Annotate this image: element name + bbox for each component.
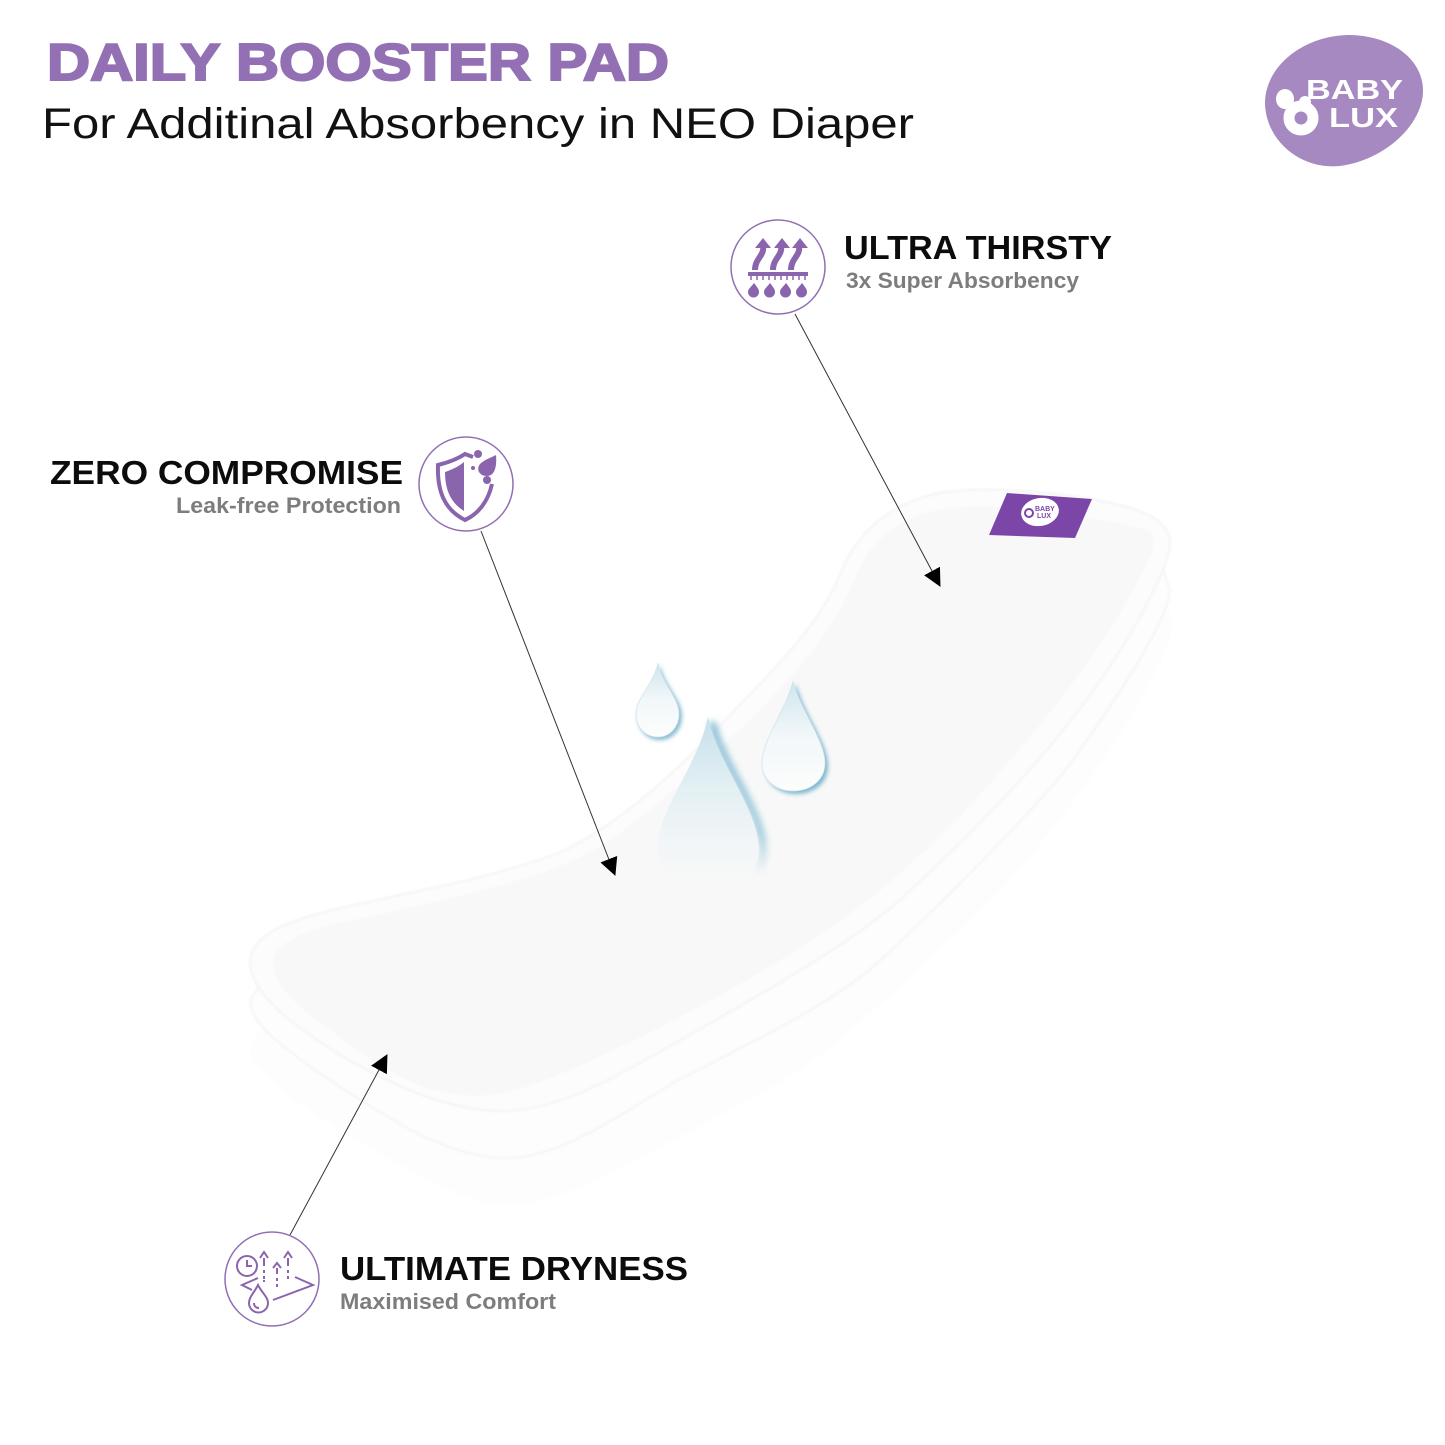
- drop: large: [658, 717, 763, 880]
- arrow: ultra thirsty: [795, 314, 940, 586]
- sewn label: LUX: [1037, 513, 1051, 520]
- subheading: Maximised Comfort: [340, 1289, 557, 1314]
- title: DAILY BOOSTER PAD: [47, 34, 669, 92]
- icon: clock, drop and surface: [225, 1232, 319, 1326]
- heading: ULTRA THIRSTY: [844, 229, 1112, 266]
- icon: shield with drops: [419, 437, 513, 531]
- water drops: [636, 663, 828, 880]
- pad layer 2: [250, 560, 1170, 1158]
- subtitle: For Additinal Absorbency in NEO Diaper: [42, 100, 914, 148]
- pad layer 1 with overlock edge: [250, 490, 1170, 1111]
- arrow: ultimate dryness: [290, 1055, 387, 1235]
- logo: Baby Lux: BABY: [1306, 74, 1403, 105]
- pad layer 3: [250, 590, 1172, 1205]
- subheading: 3x Super Absorbency: [846, 268, 1080, 293]
- sewn label: [989, 493, 1092, 538]
- drop: right: [762, 681, 828, 794]
- heading: ZERO COMPROMISE: [50, 454, 403, 491]
- drop: small: [636, 663, 682, 740]
- feature: zero compromise: [50, 437, 513, 531]
- pad inner terry surface: [273, 507, 1153, 1096]
- logo: Baby Lux: LUX: [1329, 102, 1398, 133]
- subheading: Leak-free Protection: [176, 493, 401, 518]
- sewn label: BABY: [1035, 506, 1055, 513]
- logo: Baby Lux: [1265, 35, 1423, 166]
- arrow: zero compromise: [481, 531, 615, 875]
- heading: ULTIMATE DRYNESS: [340, 1250, 688, 1287]
- feature: ultra thirsty: [731, 220, 1112, 314]
- product: stacked booster pads: [250, 490, 1172, 1205]
- icon: absorbency arrows and drops: [731, 220, 825, 314]
- feature: ultimate dryness: [225, 1232, 688, 1326]
